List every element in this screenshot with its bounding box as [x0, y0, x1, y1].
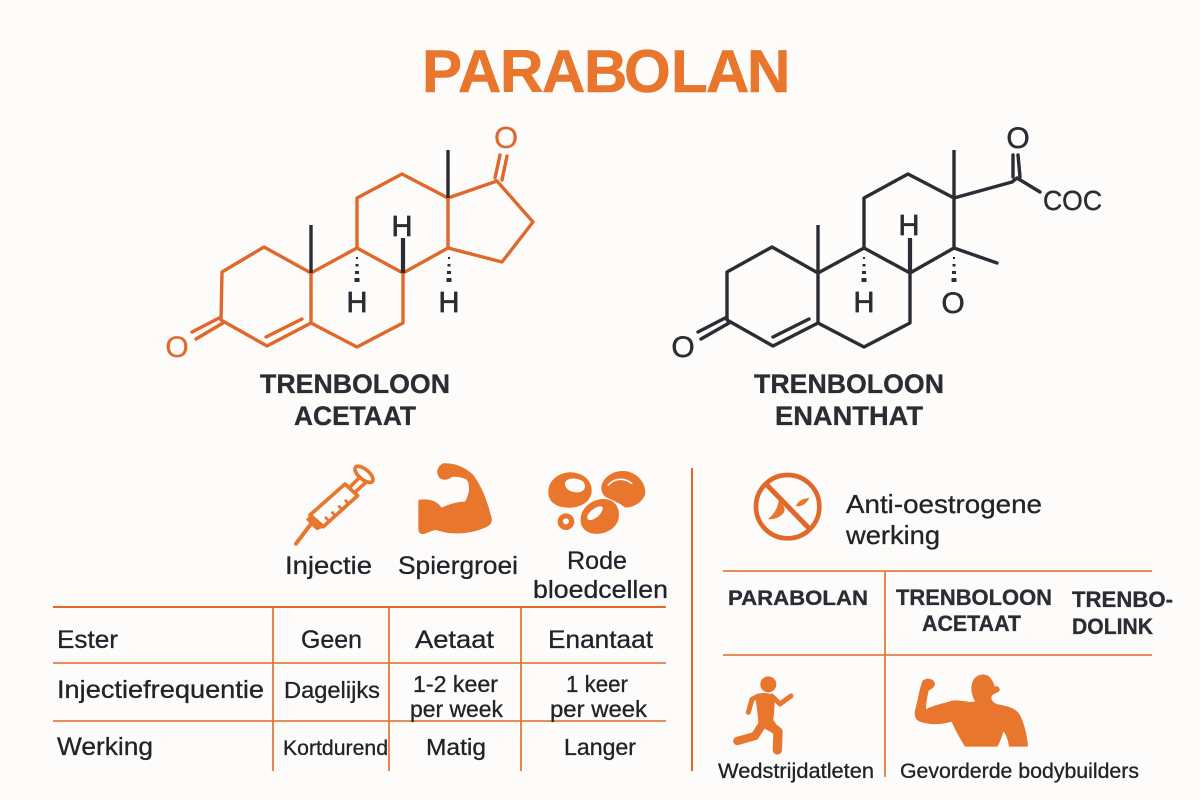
comparison table: Kortdurend — [283, 737, 388, 760]
comparison table: 1-2 keer — [413, 671, 498, 697]
molecule: trenboloon acetaat: H — [439, 287, 459, 319]
audience labels: Wedstrijdatleten — [718, 760, 874, 783]
comparison table: Injectiefrequentie — [57, 676, 264, 704]
user table: TRENBO- — [1072, 587, 1173, 612]
comparison table: Dagelijks — [284, 677, 380, 703]
molecule: trenboloon enanthat: O — [941, 287, 965, 320]
molecule: trenboloon enanthat: H — [899, 210, 919, 242]
label: trenboloon acetaat: TRENBOLOON — [260, 369, 450, 399]
comparison table — [53, 607, 666, 771]
molecule: trenboloon enanthat: O — [1006, 122, 1030, 155]
user table: PARABOLAN — [728, 587, 868, 610]
anti-oestrogen label — [845, 489, 1042, 550]
user table: DOLINK — [1072, 614, 1153, 639]
comparison table: Matig — [426, 734, 486, 760]
label: trenboloon acetaat: ACETAAT — [294, 401, 416, 431]
molecule: trenboloon acetaat — [165, 120, 533, 364]
icon: syringe — [296, 463, 376, 544]
comparison table: Enantaat — [548, 626, 653, 654]
comparison table: Aetaat — [415, 626, 494, 654]
molecule: trenboloon acetaat: H — [392, 211, 412, 243]
label: trenboloon enanthat — [754, 369, 944, 431]
label: trenboloon enanthat: TRENBOLOON — [754, 369, 944, 399]
molecule: trenboloon enanthat: COC — [1043, 185, 1102, 216]
comparison table: per week — [550, 696, 648, 722]
label: trenboloon enanthat: ENANTHAT — [775, 401, 924, 431]
icon: bodybuilder — [915, 674, 1028, 747]
user table: ACETAAT — [922, 611, 1022, 636]
molecule: trenboloon acetaat: H — [347, 287, 367, 319]
audience labels: Gevorderde bodybuilders — [900, 760, 1139, 783]
comparison table: Geen — [301, 626, 362, 654]
molecule: trenboloon acetaat: O — [494, 120, 518, 155]
molecule: trenboloon acetaat: O — [165, 331, 189, 364]
comparison table: Ester — [57, 626, 118, 654]
molecule: trenboloon enanthat — [671, 122, 1102, 364]
icon labels: bloedcellen — [533, 576, 668, 604]
anti-oestrogen label: werking — [845, 520, 940, 550]
user table: TRENBOLOON — [896, 585, 1052, 610]
icon labels: Rode — [567, 547, 627, 575]
icon labels: Injectie — [285, 552, 372, 580]
icon labels — [285, 547, 668, 604]
comparison table: 1 keer — [566, 671, 628, 697]
icon: runner — [737, 676, 791, 750]
comparison table: Werking — [57, 733, 153, 761]
molecule: trenboloon enanthat: H — [854, 287, 874, 319]
comparison table: per week — [410, 696, 503, 722]
label: trenboloon acetaat — [260, 369, 450, 431]
anti-oestrogen label: Anti-oestrogene — [846, 489, 1042, 519]
title: PARABOLAN — [422, 38, 790, 105]
icon: red blood cells — [548, 471, 645, 534]
icon: no oestrogen — [756, 475, 819, 538]
comparison table: Langer — [564, 734, 636, 760]
divider — [691, 468, 693, 771]
audience labels — [718, 760, 1139, 783]
icon labels: Spiergroei — [398, 552, 518, 580]
molecule: trenboloon enanthat: O — [671, 331, 695, 364]
user table — [723, 571, 1173, 777]
icon: flexed arm — [418, 463, 492, 534]
